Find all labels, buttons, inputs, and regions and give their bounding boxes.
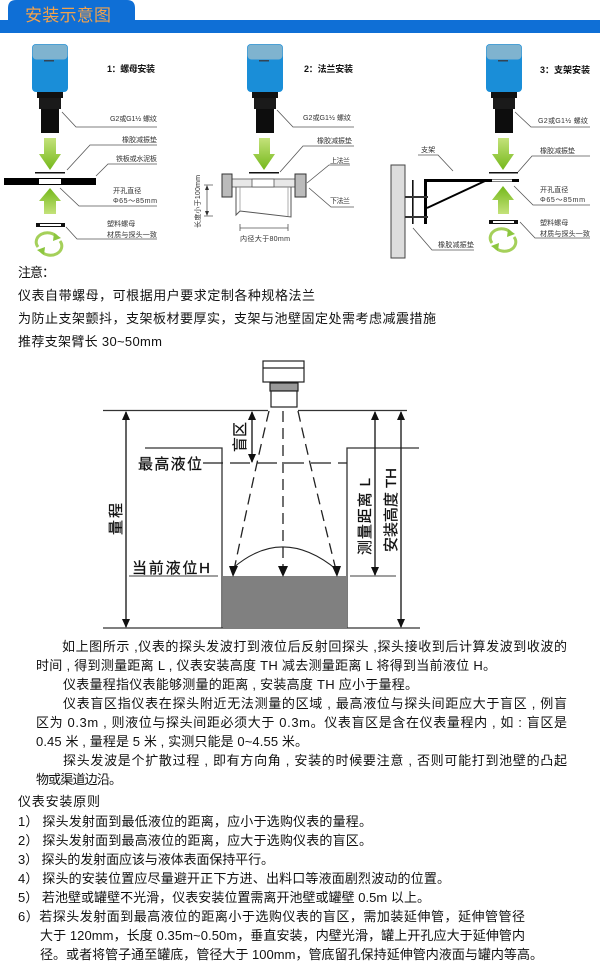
icon: probe 1 [32,44,68,133]
installation principles list: 6）若探头发射面到最高液位的距离小于选购仪表的盲区，需加装延伸管，延伸管管径 [18,909,525,924]
heading: bracket installation: 3：支架安装 [540,64,590,75]
nut 1 [36,223,65,227]
dimension: length under 100mm: 长度小于100mm [193,175,202,228]
label: hole 3: 开孔直径 [540,185,568,194]
arrow: height TH [397,411,405,628]
label: rubber gasket 2: 橡胶减振垫 [317,136,352,145]
max level dashed line [203,462,347,464]
label: plastic nut 3: 材质与探头一致 [540,229,590,238]
current level lines [129,575,396,577]
arrow: down 3 [492,138,514,170]
installation principles list: 1） 探头发射面到最低液位的距离，应小于选购仪表的量程。 [18,814,372,829]
label: thread 3: G2或G1½ 螺纹 [538,116,588,125]
icon: rotate 1 [36,233,62,255]
gasket 1 [35,172,65,174]
label: bracket: 支架 [421,145,435,154]
label: rubber gasket 1: 橡胶减振垫 [122,135,157,144]
beam arrowheads [229,566,341,577]
explanation paragraph: 0.45 米 , 量程是 5 米 , 实测只能是 0~4.55 米。 [36,734,308,749]
header band: 安装示意图 [25,6,111,25]
label: upper flange: 上法兰 [330,156,350,165]
heading: flange installation: 2：法兰安装 [304,63,353,74]
explanation paragraph: 区为 0.3m , 则液位与探头间距必须大于 0.3m。仪表盲区是含在仪表量程内 , 如 : 盲区是 [36,715,567,730]
dimension: inner diameter [240,224,290,243]
label: upper flange [307,156,350,183]
label: wall gasket: 橡胶减振垫 [438,240,474,249]
gasket 3 [489,172,518,174]
explanation paragraph: 探头发波是个扩散过程 , 即有方向角 , 安装的时候要注意 , 否则可能打到池壁的凸起 [63,753,567,768]
explanation paragraph [36,639,567,787]
label: rubber gasket 2 [280,136,354,172]
explanation paragraph: 如上图所示 ,仪表的探头发波打到液位后反射回探头 ,探头接收到后计算发波到收波的 [62,639,567,654]
installation principles list: 径。或者将管子通至罐底，管径大于 100mm，管底留孔保持延伸管内液面与罐内等高。 [40,947,543,962]
arrow: down 1 [39,138,61,170]
label: plastic nut 1: 材质与探头一致 [107,230,157,239]
installation principles list [18,794,543,962]
label: rubber gasket 3 [518,146,590,172]
label: thread 2: G2或G1½ 螺纹 [303,113,351,122]
label: plate 1: 铁板或水泥板 [116,154,157,163]
label: thread 1 [62,112,157,127]
label: plastic nut 1: 塑料螺母 [107,219,135,228]
label: hole 1: Φ65～85mm [113,197,157,205]
notes text block: 为防止支架颤抖，支架板材要厚实，支架与池壁固定处需考虑减震措施 [18,311,436,326]
explanation paragraph: 仪表盲区指仪表在探头附近无法测量的区域 , 最高液位与探头间距应大于盲区 , 例盲 [63,696,567,711]
notes text block: 推荐支架臂长 30~50mm [18,334,162,349]
notes text block: 仪表自带螺母，可根据用户要求定制各种规格法兰 [18,288,315,303]
wall [391,165,405,258]
panel: nut installation [4,44,157,255]
icon: probe 3 [486,44,522,133]
label: range: 量程 [108,503,125,535]
label: bracket [418,145,453,171]
installation principles list: 大于 120mm，长度 0.35m~0.50m，垂直安装，内壁光滑，罐上开孔应大于延伸管内 [40,928,525,943]
label: max level: 最高液位 [138,456,202,473]
liquid [223,576,347,628]
heading: nut installation: 1：螺母安装 [107,63,155,74]
panel: flange installation [193,44,354,243]
installation principles list: 仪表安装原则 [18,794,100,809]
installation principles list: 5） 若池壁或罐壁不光滑，仪表安装位置需离开池壁或罐壁 0.5m 以上。 [18,890,430,905]
icon: rotate 3 [490,229,516,251]
label: hole 1: 开孔直径 [113,186,141,195]
explanation paragraph: 时间 , 得到测量距离 L , 仪表安装高度 TH 减去测量距离 L 将得到当前液位 H。 [36,658,496,673]
label: hole 1 [60,186,157,206]
arrow: up 1 [39,188,61,214]
label: lower flange: 下法兰 [330,196,350,205]
rubber strip [412,180,414,224]
installation principles list: 4） 探头的安装位置应尽量避开正下方进、出料口等液面剧烈波动的位置。 [18,871,450,886]
explanation paragraph: 物或渠道边沿。 [36,772,122,787]
label: hole 3 [514,185,590,205]
tank lines [103,410,420,628]
dimension: inner diameter: 内径大于80mm [240,234,290,243]
arrow: blind zone [248,411,256,463]
installation principles list: 3） 探头的发射面应该与液体表面保持平行。 [18,852,274,867]
notes text block [18,265,436,349]
arrow: range [122,411,130,628]
label: plastic nut 3: 塑料螺母 [540,218,568,227]
label: plastic nut 1 [66,219,157,239]
header band [0,0,600,33]
label: current level: 当前液位H [132,560,210,577]
arrow: up 3 [492,186,514,214]
label: blind zone: 盲区 [232,422,249,452]
installation principles list: 2） 探头发射面到最高液位的距离，应大于选购仪表的盲区。 [18,833,372,848]
level measurement diagram [103,361,420,628]
panel: bracket installation [391,44,590,258]
label: rubber gasket 3: 橡胶减振垫 [540,146,575,155]
plate 1 [4,178,96,185]
explanation paragraph: 仪表量程指仪表能够测量的距离 , 安装高度 TH 应小于量程。 [63,677,418,692]
notes text block: 注意： [18,265,55,280]
label: distance L: 测量距离 L [357,478,374,555]
arrow: down 2 [253,138,275,170]
label: height TH: 安装高度 TH [383,468,400,552]
label: rubber gasket 1 [67,135,157,170]
label: wall gasket [413,228,474,250]
label: hole 3: Φ65～85mm [540,196,585,204]
label: lower flange [309,188,354,207]
sensor [263,361,304,407]
label: thread 3 [515,112,590,127]
arrow: distance L [371,411,379,576]
label: plate 1 [96,154,157,176]
reflected wave arc [233,547,337,570]
beam dashed lines [234,411,336,572]
bracket [405,179,519,224]
dimension: length under 100mm [193,175,213,228]
icon: probe 2 [247,44,283,133]
label: thread 1: G2或G1½ 螺纹 [110,114,157,123]
label: thread 2 [277,110,354,127]
flange drawing [222,174,306,217]
nut 3 [489,220,518,224]
gasket 2 [249,172,279,174]
label: plastic nut 3 [520,218,590,238]
